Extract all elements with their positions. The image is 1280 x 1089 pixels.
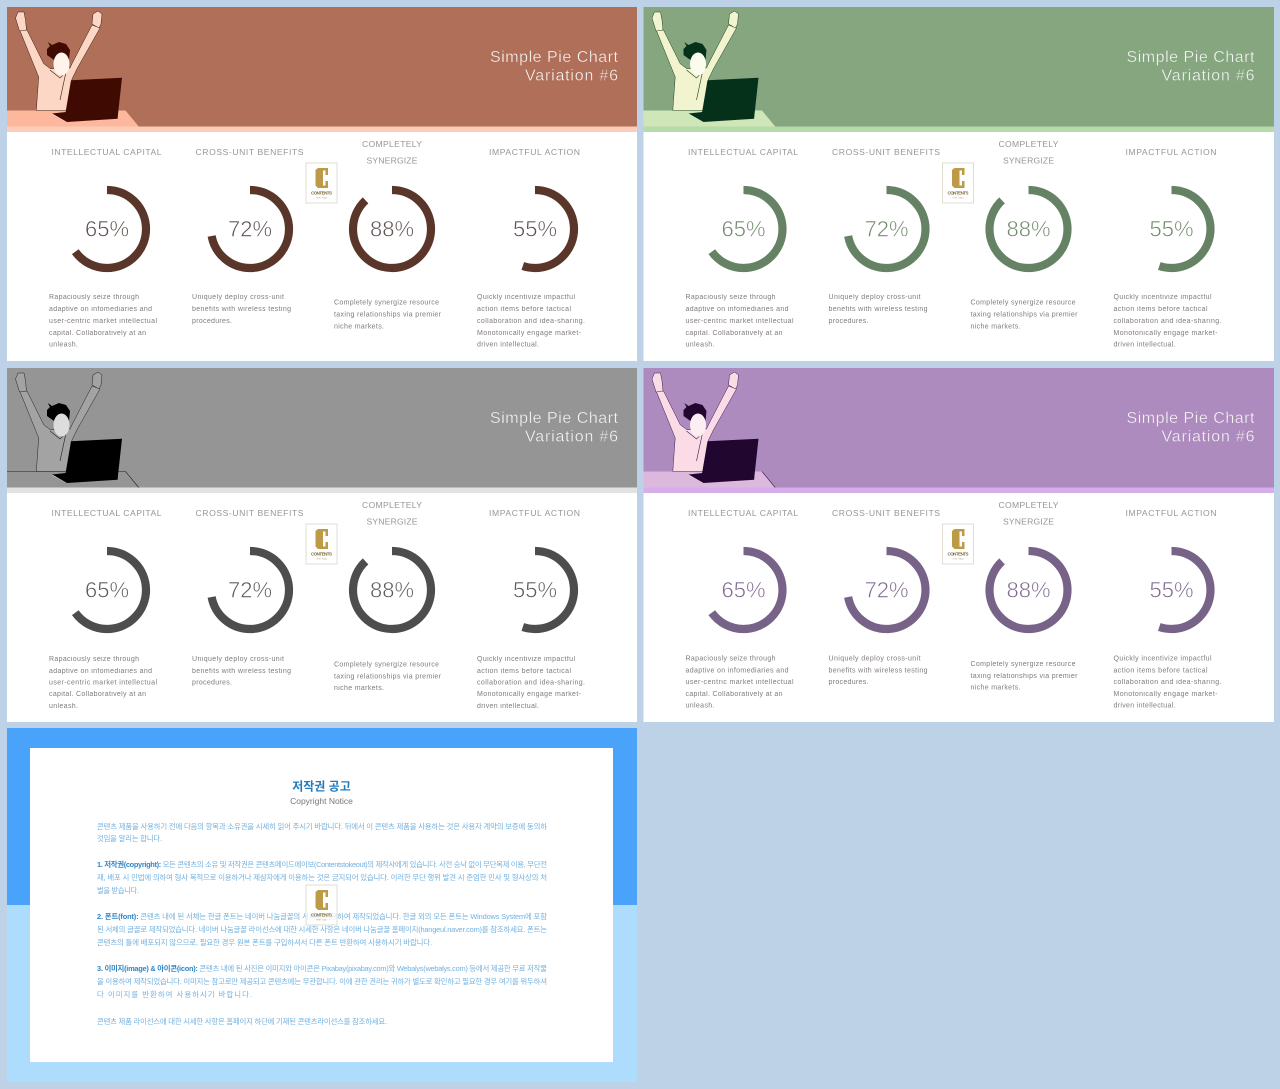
column: intellectual capital: 65% — [721, 216, 766, 242]
heading — [490, 410, 619, 446]
column: intellectual capital: adaptive on infomediaries and — [49, 668, 152, 675]
column: impactful action: Monotonically engage market- — [1114, 691, 1218, 698]
section: font: 된 서체의 글꼴로 제작되었습니다. 네이버 나눔글꼴 라이선스에 대한 시세한 사항은 네이버 나눔글꼴 홈페이지(hangeul.naver.com)를 참조하세요. 폰트는 — [97, 925, 547, 934]
column: impactful action: Quickly incentivize impactful — [1114, 656, 1212, 662]
column: cross-unit benefits: Uniquely deploy cross-unit — [828, 656, 921, 662]
column: intellectual capital: INTELLECTUAL CAPITAL — [688, 147, 798, 157]
column: cross-unit benefits — [192, 508, 304, 686]
logo badge: CONTENTS — [311, 552, 332, 556]
column: impactful action: Quickly incentivize impactful — [1114, 294, 1212, 301]
column: completely synergize — [970, 139, 1078, 330]
section: copyright: 벌을 받습니다. — [97, 886, 139, 895]
column: intellectual capital: 65% — [721, 578, 766, 602]
column: impactful action: Quickly incentivize impactful — [477, 294, 575, 301]
column: impactful action: driven intellectual. — [1114, 702, 1176, 710]
column: impactful action: collaboration and idea-sharing. — [1114, 679, 1222, 686]
column: impactful action: 55% — [1149, 578, 1194, 602]
column: completely synergize — [970, 500, 1078, 692]
column: intellectual capital — [49, 508, 162, 710]
column: intellectual capital — [686, 147, 798, 348]
column: cross-unit benefits — [828, 147, 940, 325]
column: completely synergize: Completely synergize resource — [334, 662, 439, 668]
logo badge — [942, 524, 974, 564]
column: cross-unit benefits — [828, 508, 940, 686]
column: cross-unit benefits — [192, 147, 304, 325]
column: completely synergize: 88% — [1006, 216, 1051, 242]
notice title: 저작권 공고 — [292, 778, 351, 794]
column: impactful action: action items before tactical — [1114, 306, 1208, 313]
column: impactful action: driven intellectual. — [477, 342, 539, 348]
column: impactful action: Quickly incentivize impactful — [477, 656, 575, 663]
column: cross-unit benefits: benefits with wireless testing — [828, 668, 928, 674]
column: impactful action: Monotonically engage market- — [477, 691, 582, 698]
column: intellectual capital: Rapaciously seize through — [686, 656, 776, 662]
column: completely synergize: 88% — [370, 578, 414, 602]
column: impactful action — [477, 147, 585, 348]
column: cross-unit benefits: 72% — [228, 216, 272, 242]
heading: Variation #6 — [1162, 68, 1255, 84]
column: completely synergize: COMPLETELY — [998, 500, 1059, 510]
section: font: 2. 폰트(font): 콘텐츠 내에 된 서체는 한글 폰트는 네이버 나눔글꼴의 서체를 이용하여 제작되었습니다. 한글 외의 모든 폰트는 Windows System에 포함 — [97, 912, 547, 921]
heading: Variation #6 — [525, 428, 618, 446]
notice title: Copyright Notice — [290, 796, 353, 806]
column: cross-unit benefits: procedures. — [828, 679, 869, 686]
intro paragraph: 콘텐츠 제품을 사용하기 전에 다음의 항목과 소유권을 시세히 읽어 주시기 바랍니다. 뒤에서 이 콘텐츠 제품을 사용하는 것은 사용자 계약의 보증에 동의하 — [97, 822, 547, 831]
heading: Simple Pie Chart — [1126, 49, 1255, 66]
logo badge: real logo — [316, 196, 328, 200]
column: completely synergize: 88% — [1006, 578, 1051, 602]
panel: copyright notice — [7, 728, 637, 1082]
column: impactful action: 55% — [1149, 216, 1194, 242]
heading: Simple Pie Chart — [490, 49, 619, 66]
column: impactful action: driven intellectual. — [477, 703, 539, 710]
column: impactful action: IMPACTFUL ACTION — [1126, 147, 1216, 157]
column: completely synergize: SYNERGIZE — [366, 516, 418, 526]
column: intellectual capital: user-centric market intellectual — [686, 679, 794, 686]
column: intellectual capital: user-centric market intellectual — [49, 680, 157, 686]
column: intellectual capital: unleash. — [686, 342, 715, 348]
heading — [1126, 410, 1255, 446]
column: intellectual capital: unleash. — [49, 703, 78, 710]
column: intellectual capital: adaptive on infomediaries and — [686, 306, 789, 313]
logo badge: CONTENTS — [948, 552, 968, 556]
column: cross-unit benefits: benefits with wireless testing — [192, 668, 291, 675]
column: completely synergize: SYNERGIZE — [1003, 516, 1054, 526]
column: impactful action: IMPACTFUL ACTION — [489, 147, 580, 157]
logo badge: real logo — [316, 558, 328, 560]
heading: Simple Pie Chart — [1126, 410, 1255, 427]
logo badge — [306, 885, 337, 925]
section: image and icon: 3. 이미지(image) & 아이콘(icon): 콘텐츠 내에 된 사진은 이미지와 아이콘은 Pixabay(pixabay.com)와 Webalys(webalys.com) 등에서 제공한 무료 저작물 — [97, 964, 547, 973]
column: cross-unit benefits: Uniquely deploy cross-unit — [192, 656, 284, 663]
column: cross-unit benefits: CROSS-UNIT BENEFITS — [832, 147, 940, 157]
column: intellectual capital: adaptive on infomediaries and — [686, 668, 789, 674]
column: intellectual capital: capital. Collaboratively at an — [686, 691, 783, 698]
logo badge — [306, 163, 337, 203]
column: intellectual capital: unleash. — [686, 702, 715, 710]
section: font — [97, 912, 547, 947]
column: completely synergize — [334, 500, 442, 692]
column: intellectual capital: Rapaciously seize through — [49, 294, 139, 301]
column: impactful action: IMPACTFUL ACTION — [489, 508, 580, 518]
panel: green slide — [644, 7, 1274, 361]
column: intellectual capital: INTELLECTUAL CAPITAL — [688, 508, 798, 518]
column: intellectual capital: INTELLECTUAL CAPITAL — [52, 147, 162, 157]
column: intellectual capital: Rapaciously seize through — [49, 656, 139, 663]
heading: Variation #6 — [1162, 428, 1255, 446]
column: cross-unit benefits: benefits with wireless testing — [828, 306, 928, 313]
column: impactful action: action items before tactical — [477, 306, 571, 313]
column: intellectual capital: capital. Collaboratively at an — [686, 330, 783, 337]
column: impactful action: action items before tactical — [477, 668, 571, 675]
column: impactful action: collaboration and idea-sharing. — [477, 318, 585, 325]
column: cross-unit benefits: Uniquely deploy cross-unit — [192, 294, 284, 301]
column: impactful action — [1114, 147, 1222, 348]
column: completely synergize: Completely synergize resource — [970, 661, 1076, 668]
column: intellectual capital: 65% — [85, 578, 129, 602]
column: intellectual capital: adaptive on infomediaries and — [49, 306, 152, 313]
heading: Simple Pie Chart — [490, 410, 619, 427]
column: cross-unit benefits: benefits with wireless testing — [192, 306, 291, 313]
column: cross-unit benefits: procedures. — [192, 680, 232, 686]
logo badge — [942, 163, 974, 203]
column: completely synergize: niche markets. — [970, 324, 1021, 330]
column: impactful action: Monotonically engage market- — [477, 330, 582, 337]
column: impactful action: 55% — [513, 216, 557, 242]
illustration: person cheering at laptop — [644, 372, 775, 488]
column: intellectual capital: Rapaciously seize through — [686, 294, 776, 301]
column: completely synergize: taxing relationships via premier — [334, 674, 442, 680]
column: intellectual capital — [686, 508, 798, 710]
column: cross-unit benefits: CROSS-UNIT BENEFITS — [196, 147, 304, 157]
column: impactful action: action items before tactical — [1114, 668, 1208, 674]
column: cross-unit benefits: procedures. — [828, 318, 869, 325]
panel: purple slide — [644, 368, 1274, 722]
section: copyright — [97, 860, 547, 895]
column: cross-unit benefits: CROSS-UNIT BENEFITS — [832, 508, 940, 518]
section: image and icon: 다 이미지를 반환하여 사용하시기 바랍니다. — [97, 990, 252, 999]
column: impactful action: IMPACTFUL ACTION — [1126, 508, 1216, 518]
column: completely synergize: niche markets. — [334, 685, 384, 692]
column: completely synergize: COMPLETELY — [998, 139, 1059, 149]
column: intellectual capital: user-centric market intellectual — [49, 318, 157, 325]
intro paragraph — [97, 822, 547, 843]
illustration: person cheering at laptop — [644, 11, 775, 126]
column: intellectual capital: capital. Collaboratively at an — [49, 330, 146, 337]
column: completely synergize: taxing relationships via premier — [334, 312, 442, 318]
logo badge: real logo — [316, 918, 328, 922]
column: intellectual capital: INTELLECTUAL CAPITAL — [52, 508, 162, 518]
illustration: person cheering at laptop — [7, 11, 139, 126]
column: impactful action: collaboration and idea-sharing. — [1114, 318, 1222, 325]
column: completely synergize: SYNERGIZE — [366, 156, 418, 166]
logo badge: real logo — [952, 558, 964, 560]
column: completely synergize: taxing relationships via premier — [970, 312, 1078, 318]
column: completely synergize: SYNERGIZE — [1003, 156, 1054, 166]
column: cross-unit benefits: 72% — [864, 578, 909, 602]
column: completely synergize: niche markets. — [970, 684, 1021, 692]
column: intellectual capital: unleash. — [49, 342, 78, 348]
column: completely synergize: Completely synergize resource — [970, 300, 1076, 306]
notice title — [290, 778, 353, 806]
column: impactful action: collaboration and idea-sharing. — [477, 680, 585, 686]
closing line: 콘텐츠 제품 라이선스에 대한 시세한 사항은 홈페이지 하단에 기재된 콘텐츠라이선스를 참조하세요. — [97, 1017, 387, 1026]
column: completely synergize — [334, 139, 442, 330]
column: cross-unit benefits: CROSS-UNIT BENEFITS — [196, 508, 304, 518]
column: intellectual capital: capital. Collaboratively at an — [49, 691, 146, 698]
column: completely synergize: Completely synergize resource — [334, 300, 439, 306]
column: intellectual capital: 65% — [85, 216, 129, 242]
logo badge: CONTENTS — [948, 190, 968, 196]
column: impactful action: 55% — [513, 578, 557, 602]
section: copyright: 1. 저작권(copyright): 모든 콘텐츠의 소유 및 저작권은 콘텐츠메이드에이보(Contentstokeout)의 제작사에게 있습니다. 사전 승낙 없이 무단복제 이용, 무단전 — [97, 860, 547, 869]
column: intellectual capital: user-centric market intellectual — [686, 318, 794, 325]
column: completely synergize: COMPLETELY — [362, 139, 422, 149]
section: font: 콘텐츠의 틀에 배포되지 않으므로, 필요한 경우 원본 폰트를 구입하셔서 다른 폰트 반환하여 사용하시기 바랍니다. — [97, 938, 432, 947]
column: cross-unit benefits: Uniquely deploy cross-unit — [828, 294, 921, 301]
column: completely synergize: niche markets. — [334, 324, 384, 330]
logo badge: CONTENTS — [311, 190, 332, 196]
column: impactful action: driven intellectual. — [1114, 342, 1176, 348]
column: cross-unit benefits: 72% — [228, 578, 272, 602]
intro paragraph: 것임을 알리는 합니다. — [97, 834, 162, 843]
column: completely synergize: COMPLETELY — [362, 500, 422, 510]
column: impactful action: Monotonically engage market- — [1114, 330, 1218, 337]
logo badge — [306, 524, 337, 564]
column: cross-unit benefits: 72% — [864, 216, 909, 242]
panel: brown slide — [7, 7, 637, 361]
column: completely synergize: taxing relationships via premier — [970, 673, 1078, 680]
logo badge: real logo — [952, 196, 964, 200]
section: image and icon — [97, 964, 547, 999]
illustration: person cheering at laptop — [7, 372, 139, 488]
column: cross-unit benefits: procedures. — [192, 318, 232, 325]
heading — [1126, 49, 1255, 84]
panel: grey slide — [7, 368, 637, 722]
heading — [490, 49, 619, 84]
logo badge: CONTENTS — [311, 912, 332, 918]
column: impactful action — [1114, 508, 1222, 710]
heading: Variation #6 — [525, 68, 618, 84]
column: intellectual capital — [49, 147, 162, 348]
column: completely synergize: 88% — [370, 216, 414, 242]
section: copyright: 재, 배포 시 민법에 의하여 형사 목적으로 이용하거나 제삼자에게 이용하는 것은 금지되어 있습니다. 이러한 무단 행위 발견 시 준엄한 민사 및 형사상의 처 — [97, 873, 547, 882]
section: image and icon: 을 이용하여 제작되었습니다. 이미지는 참고로만 제공되고 콘텐츠에는 무관합니다. 이에 관한 권리는 귀하가 별도로 확인하고 필요한 경우 여기를 위두하셔 — [97, 977, 547, 986]
column: impactful action — [477, 508, 585, 710]
